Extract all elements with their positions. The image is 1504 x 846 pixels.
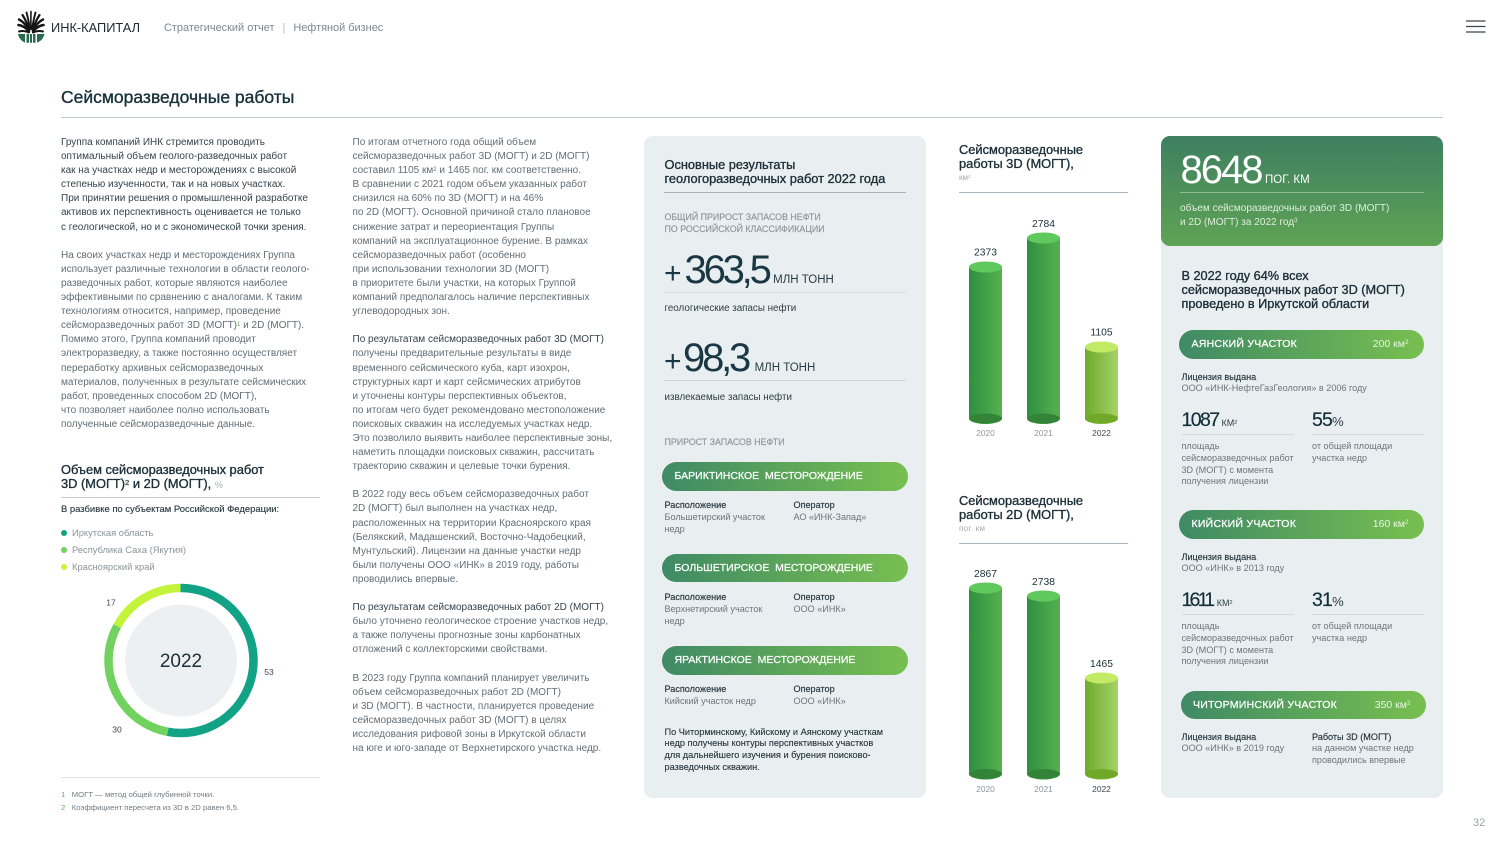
caption: reserves growth: ПРИРОСТ ЗАПАСОВ НЕФТИ: [664, 437, 785, 447]
company name: ИНК-КАПИТАЛ: [51, 20, 140, 34]
donut heading: Объем сейсморазведочных работ: [61, 462, 264, 477]
pill: Kiysky: [1179, 510, 1424, 538]
page title: Сейсморазведочные работы: [61, 87, 294, 107]
pill: Chitorminsky: ЧИТОРМИНСКИЙ УЧАСТОК: [1193, 698, 1337, 710]
text column 2: снизился на 60% по 3D (МОГТ) и на 46%: [352, 193, 543, 204]
location: Кийский участок недр: [664, 696, 756, 706]
licence: Лицензия выдана: [1182, 372, 1256, 382]
text column 2: временного сейсмического куба, карт изохрон,: [352, 362, 570, 374]
location: [664, 500, 765, 534]
bar chart: 3D: 1105: [1090, 328, 1113, 338]
legend: Республика Саха (Якутия): [72, 544, 186, 554]
text column 2: было уточнено геологическое строение участков недр,: [352, 616, 608, 627]
text column 2: и 3D (МОГТ). В частности, планируется проведение: [352, 701, 594, 712]
stat: geological reserves: +363,5 МЛН ТОНН: [664, 248, 834, 292]
licence: [1182, 732, 1284, 753]
location: Верхнетирский участок: [664, 604, 762, 614]
text column 2: снижение затрат и переориентация Группы: [352, 222, 554, 233]
text column 2: при использовании технологии 3D (МОГТ): [352, 264, 549, 275]
text column 1: [61, 137, 310, 430]
stat description: площадь: [1182, 441, 1219, 451]
stat description: [1182, 621, 1294, 666]
icon: menu: [1466, 20, 1486, 33]
location: Большетирский участок: [664, 512, 765, 522]
closing note: По Читорминскому, Кийскому и Аянскому участкам: [664, 726, 883, 736]
text column 2: сейсморазведочных работ 3D (МОГТ) в целях: [352, 715, 566, 726]
licence: ООО «ИНК-НефтеГазГеология» в 2006 году: [1182, 383, 1367, 393]
footnotes: 1 МОГТ — метод общей глубинной точки.: [61, 790, 214, 798]
heading: 3D chart: [959, 142, 1083, 171]
text column 1: материалов, полученных в результате сейсмических: [61, 377, 306, 388]
bar chart: 2D: 1465: [1090, 659, 1113, 670]
heading: 2D chart: Сейсморазведочные: [959, 492, 1083, 508]
text column 1: как на участках недр и месторождениях с высокой: [61, 165, 296, 176]
stat description: 3D (МОГТ) с момента: [1182, 645, 1273, 655]
licence: Лицензия выдана: [1182, 732, 1256, 742]
location: [664, 684, 756, 706]
text column 1: Помимо этого, Группа компаний проводит: [61, 334, 256, 345]
licence: [1182, 552, 1284, 573]
text column 2: расположенных на территории Красноярского края: [352, 518, 591, 529]
panel heading: проведено в Иркутской области: [1182, 297, 1369, 311]
operator: ООО «ИНК»: [794, 604, 846, 614]
bar chart: 3D: 2784: [1032, 219, 1055, 230]
text column 2: компаний на эксплуатационное бурение. В рамках: [352, 236, 588, 247]
text column 2: объем сейсморазведочных работ 2D (МОГТ): [352, 687, 561, 698]
text column 2: были получены ООО «ИНК» в 2019 году, работы: [352, 560, 579, 571]
text column 1: оптимальный объем геолого-разведочных работ: [61, 151, 287, 162]
pill: Kiysky: 160 км2: [1373, 518, 1408, 530]
text column 2: 2D (МОГТ) был выполнен на участках недр,: [352, 503, 557, 514]
donut chart: [104, 584, 274, 738]
pill: Yaraktinskoe: [662, 646, 908, 674]
stat label: извлекаемые запасы нефти: [664, 392, 792, 402]
text column 2: получены предварительные результаты в виде: [352, 348, 571, 359]
text column 1: На своих участках недр и месторождениях Группа: [61, 250, 295, 261]
bar chart: 2D: 2867: [974, 569, 997, 580]
text column 1: сейсморазведочных работ 3D (МОГТ)1 и 2D (МОГТ).: [61, 320, 304, 331]
text column 2: по итогам чего будет рекомендовано местоположение: [352, 405, 605, 416]
text column 2: в приоритете были участки, на которых Группой: [352, 278, 576, 289]
stat description: [1182, 441, 1294, 486]
stat: 1611: 1611 КМ2: [1182, 589, 1232, 611]
location: недр: [664, 616, 685, 626]
text column 1: разведочных работ, которые являются наиболее: [61, 278, 288, 289]
legend: Красноярский край: [72, 562, 155, 572]
text column 2: По результатам сейсморазведочных работ 2D (МОГТ): [352, 602, 604, 613]
operator: ООО «ИНК»: [794, 696, 846, 706]
text column 1: электроразведку, а также постоянно осуществляет: [61, 348, 297, 359]
text column 2: (Белякский, Мадашенский, Восточно-Чадобецкий,: [352, 532, 586, 543]
bar chart: 3D: [969, 219, 1118, 438]
pill: Yaraktinskoe: ЯРАКТИНСКОЕ МЕСТОРОЖДЕНИЕ: [674, 654, 855, 666]
stat description: [1312, 621, 1392, 643]
location: Расположение: [664, 500, 726, 510]
donut chart: 53: [264, 667, 274, 677]
donut chart: 30: [112, 724, 122, 734]
stat description: [1180, 202, 1389, 228]
header logo: [17, 10, 45, 43]
text column 1: эффективными по сравнению с аналогами. К таким: [61, 292, 302, 303]
page number: 32: [1473, 817, 1485, 829]
pill: Kiysky: КИЙСКИЙ УЧАСТОК: [1192, 518, 1296, 530]
pill: Chitorminsky: 350 км2: [1375, 698, 1410, 710]
stat description: сейсморазведочных работ: [1182, 453, 1294, 463]
stat description: от общей площади: [1312, 441, 1392, 451]
text column 2: В 2022 году весь объем сейсморазведочных работ: [352, 489, 589, 500]
location: Расположение: [664, 592, 726, 602]
stat: 31%: 31%: [1312, 589, 1344, 611]
stat description: и 2D (МОГТ) за 2022 год3: [1180, 217, 1297, 228]
3D works note: Работы 3D (МОГТ): [1312, 732, 1391, 742]
stat description: объем сейсморазведочных работ 3D (МОГТ): [1180, 202, 1389, 214]
bar chart: 3D: 2373: [974, 248, 997, 258]
text column 1: технологиям относится, например, проведение: [61, 306, 281, 317]
bar chart: 3D: 2021: [1034, 428, 1053, 438]
operator: АО «ИНК-Запад»: [794, 512, 866, 522]
panel heading: сейсморазведочных работ 3D (МОГТ): [1182, 283, 1405, 297]
stat description: сейсморазведочных работ: [1182, 633, 1294, 643]
unit: 3D chart: км2: [959, 173, 971, 182]
panel: licence areas: [1161, 136, 1443, 798]
caption: total reserves growth: ПО РОССИЙСКОЙ КЛАССИФИКАЦИИ: [664, 224, 825, 234]
bar chart: 3D: 2022: [1092, 428, 1111, 438]
donut chart: 17: [106, 598, 116, 608]
breadcrumb: Стратегический отчет | Нефтяной бизнес: [164, 22, 383, 34]
text column 2: углеводородных зон.: [352, 306, 450, 317]
text column 1: полученные сейсморазведочные данные.: [61, 419, 255, 430]
legend: Иркутская область: [72, 528, 153, 538]
stat description: от общей площади: [1312, 621, 1392, 631]
bar chart: 3D: 2020: [976, 428, 995, 438]
pill: Bolshetirskoe: БОЛЬШЕТИРСКОЕ МЕСТОРОЖДЕНИЕ: [674, 562, 873, 574]
donut heading: 3D (МОГТ)2 и 2D (МОГТ), %: [61, 476, 223, 491]
3D works note: на данном участке недр: [1312, 743, 1414, 753]
text column 1: что позволяет наиболее полно использовать: [61, 405, 270, 416]
closing note: для дальнейшего изучения и бурения поисково-: [664, 750, 871, 760]
stat: 8648: 8648 ПОГ. КМ: [1180, 148, 1310, 192]
text column 2: По результатам сейсморазведочных работ 3D (МОГТ): [352, 334, 604, 345]
text column 1: работ, проведенных способом 2D (МОГТ),: [61, 391, 257, 402]
card: total volume: [1161, 136, 1443, 246]
text column 2: по 2D (МОГТ). Основной причиной стало плановое: [352, 207, 591, 218]
heading: 2D chart: [959, 492, 1083, 522]
text column 1: активов их перспективность оценивается не только: [61, 207, 301, 218]
location: [664, 592, 762, 626]
stat description: получения лицензии: [1182, 476, 1268, 486]
operator: Оператор: [794, 592, 835, 602]
text column 2: проводились впервые.: [352, 574, 458, 585]
text column 1: При принятии решения о промышленной разработке: [61, 193, 308, 204]
stat: 55%: 55%: [1312, 409, 1344, 431]
stat description: получения лицензии: [1182, 656, 1268, 666]
location: Расположение: [664, 684, 726, 694]
location: недр: [664, 524, 685, 534]
stat: 1087: 1087 КМ2: [1182, 409, 1237, 431]
panel heading: геологоразведочных работ 2022 года: [664, 171, 885, 186]
licence: Лицензия выдана: [1182, 552, 1256, 562]
text column 2: и уточнены контуры перспективных объектов,: [352, 391, 566, 402]
text column 2: наметить площадки поисковых скважин, рассчитать: [352, 447, 594, 458]
operator: [794, 684, 846, 706]
licence: ООО «ИНК» в 2013 году: [1182, 563, 1284, 573]
text column 2: В сравнении с 2021 годом объем указанных работ: [352, 179, 587, 190]
bar chart: 2D: 2738: [1032, 577, 1055, 588]
panel heading: [664, 157, 886, 186]
text column 2: на юге и юго-западе от Верхнетирского участка недр.: [352, 743, 601, 754]
pill: Bolshetirskoe: [662, 554, 908, 582]
3D works note: проводились впервые: [1312, 755, 1406, 765]
text column 2: траекторию скважин и целевые точки бурения.: [352, 461, 570, 472]
pill: Ayansky: АЯНСКИЙ УЧАСТОК: [1192, 338, 1297, 350]
text column 1: степенью изученности, так и на новых участках.: [61, 179, 285, 190]
panel: exploration results: [644, 136, 926, 798]
pill: Bariktinskoe: БАРИКТИНСКОЕ МЕСТОРОЖДЕНИЕ: [674, 470, 863, 482]
legend: [61, 528, 186, 572]
bar chart: 2D: 2020: [976, 784, 995, 794]
text column 2: а также получены прогнозные зоны карбонатных: [352, 630, 581, 641]
caption: total reserves growth: [664, 211, 825, 234]
donut subheading: В разбивке по субъектам Российской Федерации:: [61, 504, 279, 514]
footnotes: 2 Коэффициент пересчета из 3D в 2D равен 6,5.: [61, 803, 239, 812]
text column 1: с геологической, но и с экономической точки зрения.: [61, 222, 306, 233]
licence: ООО «ИНК» в 2019 году: [1182, 743, 1284, 753]
bar chart: 2D: [969, 569, 1118, 794]
text column 2: поисковых скважин на исследуемых участках недр.: [352, 419, 592, 430]
heading: 3D chart: Сейсморазведочные: [959, 142, 1083, 156]
donut heading: [61, 462, 264, 491]
stat description: участка недр: [1312, 633, 1367, 643]
text column 2: составил 1105 км2 и 1465 пог. км соответственно.: [352, 165, 581, 176]
panel heading: Основные результаты: [664, 157, 795, 172]
text column 2: В 2023 году Группа компаний планирует увеличить: [352, 673, 589, 684]
operator: Оператор: [794, 684, 835, 694]
stat description: участка недр: [1312, 453, 1367, 463]
stat description: 3D (МОГТ) с момента: [1182, 465, 1273, 475]
text column 2: исследования рифовой зоны в Иркутской области: [352, 729, 586, 740]
bar chart: 2D: 2022: [1092, 784, 1111, 794]
pill: Chitorminsky: [1181, 690, 1426, 719]
operator: Оператор: [794, 500, 835, 510]
donut chart: 2022: [160, 651, 202, 672]
heading: 2D chart: работы 2D (МОГТ),: [959, 506, 1074, 522]
text column 2: По итогам отчетного года общий объем: [352, 137, 536, 148]
text column 1: Группа компаний ИНК стремится проводить: [61, 137, 265, 148]
text column 1: использует различные технологии в области геолого-: [61, 264, 310, 275]
closing note: разведочных скважин.: [664, 762, 760, 772]
text column 1: переработку архивных сейсморазведочных: [61, 362, 263, 374]
stat: recoverable reserves: +98,3 МЛН ТОНН: [664, 336, 815, 380]
unit: 2D chart: пог. км: [959, 524, 985, 533]
stat description: площадь: [1182, 621, 1219, 631]
pill: Ayansky: 200 км2: [1373, 338, 1408, 350]
text column 2: Это позволило выявить наиболее перспективные зоны,: [352, 433, 612, 444]
bar chart: 2D: 2021: [1034, 784, 1053, 794]
panel heading: [1182, 269, 1405, 311]
closing note: недр получены контуры перспективных участков: [664, 738, 873, 748]
closing note: [664, 726, 883, 772]
licence: [1182, 372, 1367, 393]
operator: [794, 592, 846, 614]
3D works note: [1312, 732, 1414, 765]
text column 2: [352, 137, 612, 754]
stat label: геологические запасы нефти: [664, 302, 796, 314]
text column 2: сейсморазведочных работ 3D (МОГТ) и 2D (МОГТ): [352, 151, 590, 162]
footnotes: [61, 790, 239, 812]
operator: [794, 500, 866, 522]
text column 2: компаний предполагалось наличие перспективных: [352, 292, 590, 303]
stat description: [1312, 441, 1392, 463]
panel heading: В 2022 году 64% всех: [1182, 269, 1309, 283]
text column 2: отложений с коллекторскими свойствами.: [352, 644, 547, 655]
text column 2: структурных карт и карт сейсмических атрибутов: [352, 377, 581, 388]
text column 2: Мунтульский). Лицензии на данные участки недр: [352, 546, 581, 557]
text column 2: сейсморазведочных работ (особенно: [352, 250, 526, 261]
pill: Ayansky: [1179, 330, 1424, 358]
heading: 3D chart: работы 3D (МОГТ),: [959, 156, 1074, 170]
pill: Bariktinskoe: [662, 462, 908, 490]
caption: total reserves growth: ОБЩИЙ ПРИРОСТ ЗАПАСОВ НЕФТИ: [664, 212, 821, 222]
